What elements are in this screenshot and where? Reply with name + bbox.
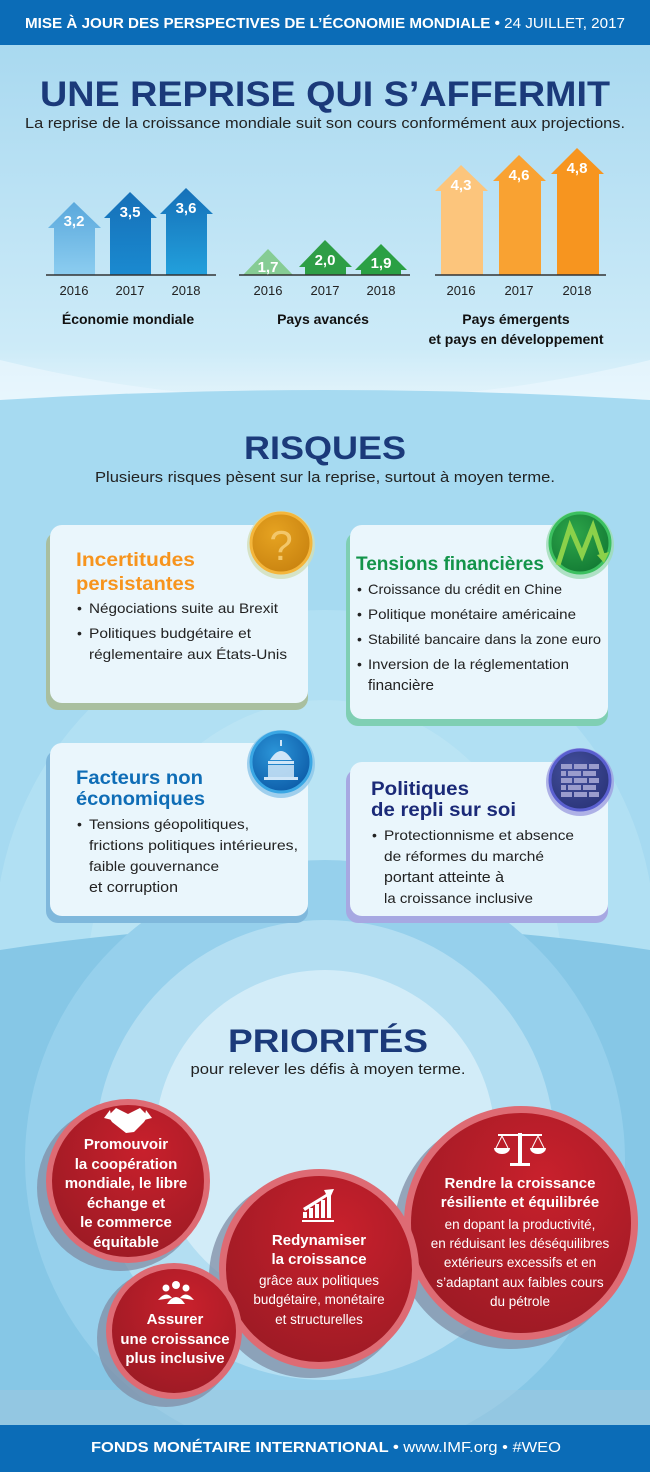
panel: incertitudes persistantes: réglementaire aux États-Unis [89,646,287,662]
footer [0,1425,650,1472]
panel: tensions financieres: • [357,581,362,597]
icon: question mark: ? [269,522,293,569]
heading: risques [95,430,555,486]
chart: pays emergents: 2018 [563,283,591,298]
circle: croissance inclusive [97,1263,242,1407]
panel: incertitudes persistantes [46,511,315,710]
heading: priorites: PRIORITÉS [228,1023,428,1059]
circle: croissance resiliente: extérieurs excessifs et en [444,1255,596,1270]
circle: cooperation mondiale [37,1099,210,1271]
chart: pays emergents: et pays en développement [428,331,604,347]
circle: croissance resiliente: du pétrole [490,1294,550,1309]
icon: scales [494,1133,546,1166]
panel: facteurs non economiques: frictions politiques intérieures, [89,837,298,853]
chart: pays emergents [428,148,606,347]
panel: tensions financieres: Tensions financières [356,554,544,575]
icon: handshake [104,1108,152,1133]
icon: capitol [247,730,315,798]
icon: zigzag chart [546,511,614,579]
chart: pays avances: Pays avancés [277,311,369,327]
header bar [0,0,650,45]
chart: economie mondiale: 2016 [60,283,88,298]
panel: facteurs non economiques [46,730,315,923]
circle: redynamiser la croissance: budgétaire, monétaire [253,1292,385,1307]
chart: pays emergents: 4,3 [451,177,471,194]
header bar: MISE À JOUR DES PERSPECTIVES DE L’ÉCONOMIE MONDIALE • 24 JUILLET, 2017 [25,15,625,32]
circle: cooperation mondiale: échange et [87,1195,165,1212]
panel: incertitudes persistantes: • [77,600,82,616]
panel: politiques de repli sur soi: portant atteinte à [384,869,505,886]
panel: politiques de repli sur soi: Protectionnisme et absence [384,827,574,843]
panel: tensions financieres: Inversion de la réglementation [368,656,569,672]
circle: croissance resiliente: en dopant la productivité, [445,1217,595,1232]
icon: brick wall [546,748,614,816]
chart: pays avances: 2016 [254,283,282,298]
chart: economie mondiale: 2017 [116,283,144,298]
chart: pays avances: 2017 [311,283,339,298]
chart: pays emergents: 2016 [447,283,475,298]
panel: politiques de repli sur soi: • [372,827,377,843]
circle: croissance inclusive: plus inclusive [125,1350,225,1367]
chart: economie mondiale: 3,5 [120,204,140,221]
heading: risques: Plusieurs risques pèsent sur la reprise, surtout à moyen terme. [95,469,555,486]
panel: incertitudes persistantes: • [77,625,82,641]
panel: tensions financieres: Croissance du crédit en Chine [368,581,562,597]
heading: priorites [190,1023,466,1078]
panel: incertitudes persistantes: Incertitudes [76,550,195,571]
circle: croissance inclusive: Assurer [147,1311,204,1328]
chart: pays emergents: 4,6 [509,167,529,184]
circle: cooperation mondiale: mondiale, le libre [65,1175,187,1192]
panel: facteurs non economiques: faible gouvernance [89,858,219,874]
circle: cooperation mondiale: Promouvoir [84,1136,168,1153]
chart: pays avances: 2,0 [315,252,335,269]
heading: risques: RISQUES [244,430,406,466]
panel: tensions financieres: • [357,631,362,647]
chart: economie mondiale: 2018 [172,283,200,298]
chart: pays avances: 2018 [367,283,395,298]
icon: question mark [247,511,315,579]
panel: tensions financieres [346,511,614,726]
chart: economie mondiale: 3,6 [176,200,196,217]
panel: facteurs non economiques: • [77,816,82,832]
circle: croissance inclusive: une croissance [120,1331,230,1348]
panel: facteurs non economiques: économiques [76,789,205,810]
panel: facteurs non economiques: et corruption [89,879,178,896]
title: UNE REPRISE QUI S’AFFERMIT [40,75,610,114]
circle: croissance resiliente: en réduisant les déséquilibres [431,1236,610,1251]
panel: politiques de repli sur soi [346,748,614,923]
subtitle: La reprise de la croissance mondiale suit son cours conformément aux projections. [25,115,625,132]
circle: redynamiser la croissance [209,1169,419,1378]
circle: redynamiser la croissance: grâce aux politiques [259,1273,379,1288]
icon: growth chart [302,1189,334,1222]
panel: politiques de repli sur soi: la croissance inclusive [384,890,533,906]
circle: cooperation mondiale: le commerce [80,1214,172,1231]
circle: croissance resiliente: Rendre la croissance [445,1175,595,1192]
panel: tensions financieres: • [357,606,362,622]
panel: tensions financieres: Politique monétaire américaine [368,606,576,622]
panel: tensions financieres: financière [368,677,434,694]
circle: croissance resiliente [394,1106,638,1349]
panel: politiques de repli sur soi: de repli sur soi [371,800,516,821]
chart: pays avances [239,240,410,327]
chart: economie mondiale [46,188,216,327]
chart: economie mondiale: Économie mondiale [62,311,194,327]
circle: cooperation mondiale: la coopération [75,1156,177,1173]
circle: redynamiser la croissance: la croissance [271,1251,367,1268]
panel: facteurs non economiques: Tensions géopolitiques, [89,816,249,832]
panel: facteurs non economiques: Facteurs non [76,768,203,789]
circle: redynamiser la croissance: Redynamiser [272,1232,366,1249]
chart: pays emergents: Pays émergents [462,311,570,327]
footer: FONDS MONÉTAIRE INTERNATIONAL • www.IMF.org • #WEO [91,1439,561,1456]
panel: tensions financieres: Stabilité bancaire dans la zone euro [368,631,601,647]
circle: croissance resiliente: résiliente et équilibrée [441,1194,599,1211]
chart: pays avances: 1,7 [258,259,278,276]
panel: tensions financieres: • [357,656,362,672]
chart: pays emergents: 4,8 [567,160,587,177]
panel: incertitudes persistantes: persistantes [76,574,195,595]
panel: incertitudes persistantes: Négociations suite au Brexit [89,600,278,616]
panel: politiques de repli sur soi: Politiques [371,779,469,800]
panel: incertitudes persistantes: Politiques budgétaire et [89,625,251,641]
circle: cooperation mondiale: équitable [93,1234,159,1251]
circle: croissance resiliente: s’adaptant aux faibles cours [436,1275,604,1290]
heading: priorites: pour relever les défis à moyen terme. [190,1061,466,1078]
chart: pays avances: 1,9 [371,255,391,272]
chart: economie mondiale: 3,2 [64,213,84,230]
panel: politiques de repli sur soi: de réformes du marché [384,848,544,864]
chart: pays emergents: 2017 [505,283,533,298]
circle: redynamiser la croissance: et structurelles [275,1312,363,1327]
icon: people [158,1281,194,1304]
